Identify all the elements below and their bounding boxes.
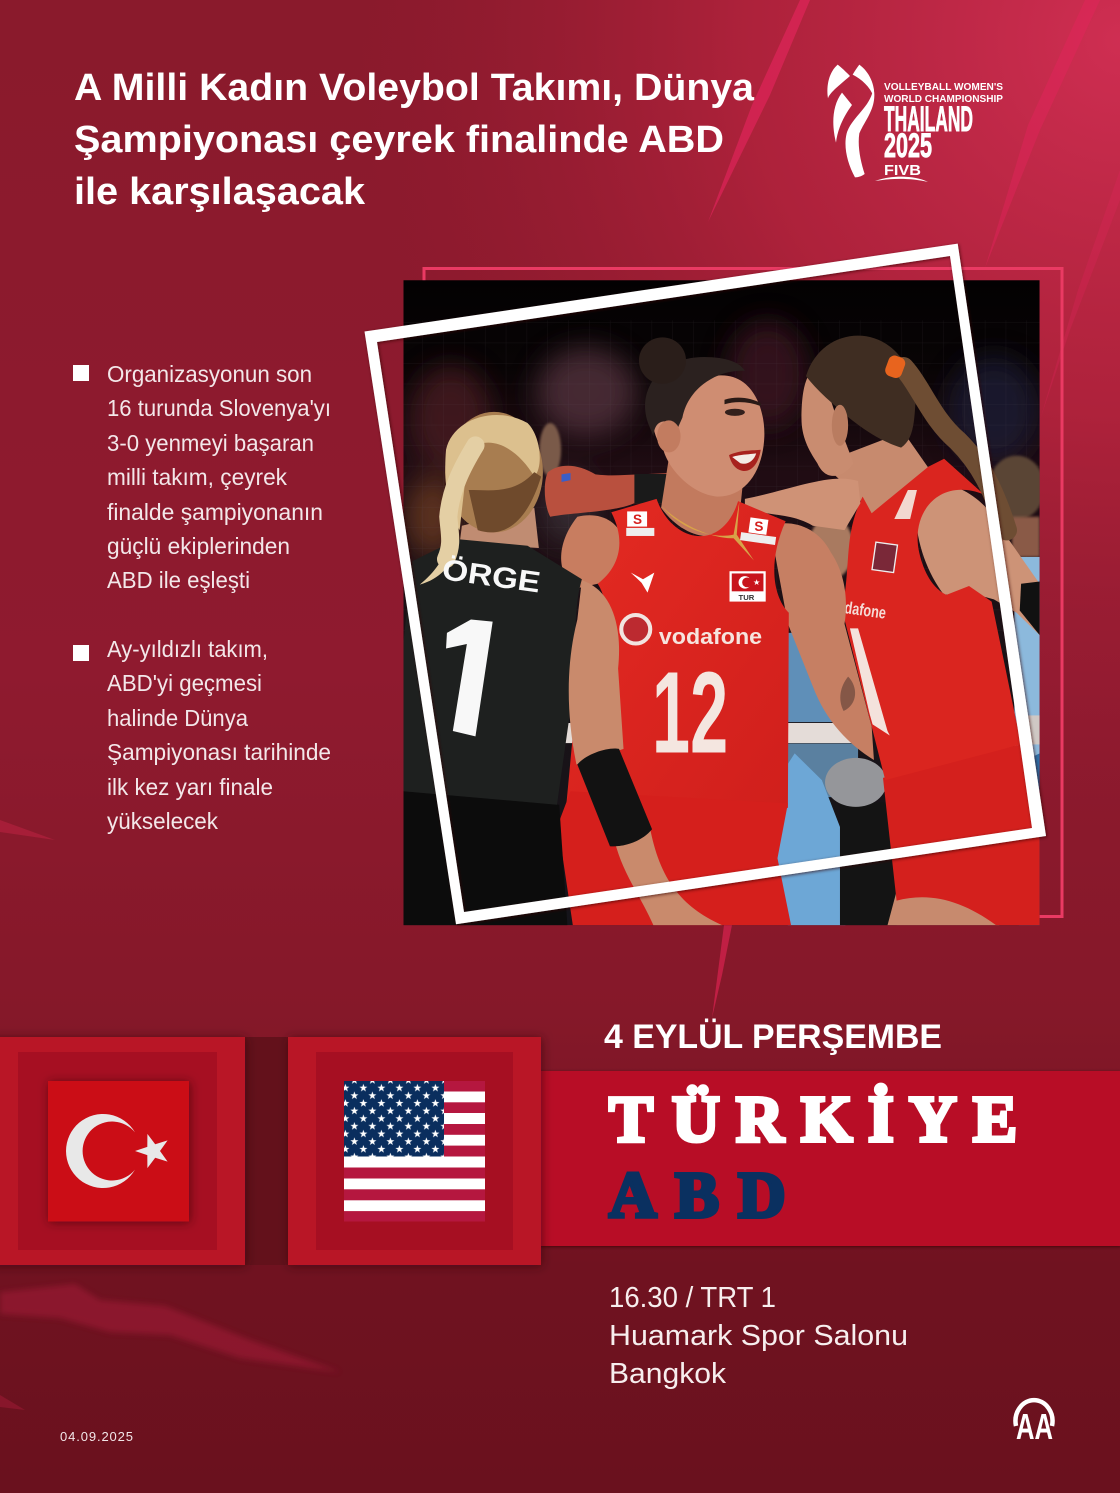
match details bbox=[609, 1282, 908, 1390]
right player: dafone bbox=[843, 598, 887, 623]
jersey flag badge: ★ bbox=[753, 578, 760, 587]
date heading: 4 EYLÜL PERŞEMBE bbox=[604, 1018, 942, 1056]
logo: FIVB Volleyball Women's World Championship: WORLD CHAMPIONSHIP bbox=[884, 94, 1003, 105]
panel: USA flag bbox=[288, 1037, 541, 1265]
match details: Bangkok bbox=[609, 1358, 727, 1390]
right player bbox=[801, 336, 1040, 925]
bullet block 2: Şampiyonası tarihinde bbox=[107, 739, 331, 765]
middle player bbox=[545, 337, 874, 925]
background spectators and net bbox=[539, 423, 1045, 925]
bullet block 1: 3-0 yenmeyi başaran bbox=[107, 430, 314, 456]
pink streak: top right bbox=[985, 0, 1100, 268]
bullet list bbox=[73, 361, 331, 834]
match details: Huamark Spor Salonu bbox=[609, 1320, 908, 1352]
logo: AA: AA bbox=[1016, 1406, 1053, 1447]
pink outline frame bbox=[424, 268, 1062, 916]
vodafone sponsor: vodafone bbox=[659, 624, 762, 649]
bullet block 1: finalde şampiyonanın bbox=[107, 499, 323, 525]
jersey name and number bbox=[440, 553, 542, 736]
middle player: 12 bbox=[652, 647, 728, 777]
logo: FIVB Volleyball Women's World Championship: 2025 bbox=[884, 127, 932, 165]
bullet block 2: ilk kez yarı finale bbox=[107, 774, 273, 800]
pink streak: top centre bbox=[708, 0, 810, 222]
bullet block 1: 16 turunda Slovenya'yı bbox=[107, 395, 331, 421]
logo: FIVB Volleyball Women's World Championship: VOLLEYBALL WOMEN'S bbox=[884, 82, 1003, 93]
bullet block 1: ABD ile eşleşti bbox=[107, 567, 250, 593]
bullet block 2 bbox=[73, 636, 331, 834]
bullet block 2: Ay-yıldızlı takım, bbox=[107, 636, 268, 662]
title bbox=[74, 67, 755, 213]
logo: FIVB Volleyball Women's World Championship: FIVB bbox=[884, 162, 921, 179]
match info red band bbox=[530, 1071, 1120, 1246]
streak: left edge lower bbox=[0, 1395, 25, 1410]
streak below photo bbox=[712, 925, 732, 1018]
match details: 16.30 / TRT 1 bbox=[609, 1282, 776, 1314]
pink streak: right edge bbox=[1040, 170, 1120, 420]
icon: volleyball trophy emblem bbox=[827, 65, 874, 177]
lightning streak: lower left bbox=[0, 1284, 340, 1372]
black jersey player bbox=[403, 412, 722, 925]
team name: Türkiye: TÜRKİYE bbox=[609, 1083, 1017, 1156]
team name: ABD: ABD bbox=[609, 1159, 786, 1232]
photo: three volleyball players celebrating bbox=[403, 280, 1045, 925]
vodafone sponsor bbox=[621, 615, 762, 649]
elbow pad bbox=[577, 748, 652, 846]
jersey flag badge: TUR bbox=[739, 593, 755, 602]
bullet block 1: güçlü ekiplerinden bbox=[107, 533, 290, 559]
streak: left edge bbox=[0, 820, 55, 840]
logo: FIVB Volleyball Women's World Championship bbox=[827, 65, 1003, 182]
icon: Turkish flag bbox=[48, 1081, 189, 1222]
bullet block 2: yükselecek bbox=[107, 808, 218, 834]
title: ile karşılaşacak bbox=[74, 171, 366, 213]
bullet block 2: ABD'yi geçmesi bbox=[107, 670, 262, 696]
logo: FIVB Volleyball Women's World Championship: THAILAND bbox=[884, 100, 973, 139]
publication date: 04.09.2025 bbox=[60, 1429, 133, 1444]
jersey flag badge bbox=[729, 571, 766, 602]
middle player: S bbox=[754, 519, 763, 534]
bullet block 1: milli takım, çeyrek bbox=[107, 464, 287, 490]
logo: AA bbox=[1016, 1400, 1053, 1447]
title: A Milli Kadın Voleybol Takımı, Dünya bbox=[74, 67, 755, 109]
middle player: S bbox=[633, 512, 642, 527]
white tilted photo frame bbox=[364, 244, 1046, 924]
panel: Turkey flag bbox=[0, 1037, 245, 1265]
title: Şampiyonası çeyrek finalinde ABD bbox=[74, 119, 724, 161]
icon: US flag bbox=[344, 1081, 485, 1222]
bullet block 1: Organizasyonun son bbox=[107, 361, 312, 387]
bullet block 2: halinde Dünya bbox=[107, 705, 248, 731]
flag panel band bbox=[0, 1037, 1120, 1265]
bullet block 1 bbox=[73, 361, 331, 593]
jersey name and number: ÖRGE bbox=[440, 553, 542, 599]
